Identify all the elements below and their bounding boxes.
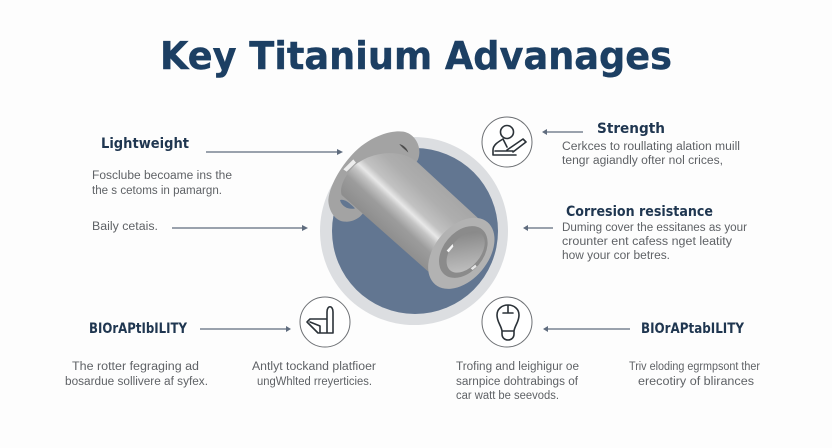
text: left column one: The rotter fegraging ad	[72, 361, 199, 373]
central titanium illustration	[320, 131, 508, 325]
arrow: baily cetais	[172, 225, 308, 231]
heading: strength: Strength	[597, 121, 665, 137]
flange	[328, 131, 419, 222]
arrow: corrosion resistance	[523, 225, 553, 231]
text: lightweight description: the s cetoms in pamargn.	[92, 185, 222, 197]
front rim	[415, 205, 508, 302]
panel: strength	[482, 117, 740, 167]
heading: lightweight: Lightweight	[101, 136, 189, 152]
heading: corrosion resistance: Corresion resistance	[566, 204, 713, 220]
text: strength description: Cerkces to roullating alation muill	[562, 141, 740, 153]
text: right column one: Trofing and leighigur oe	[456, 361, 579, 373]
text: right column one: car watt be seevods.	[456, 390, 559, 402]
text: corrosion description: Duming cover the essitanes as your	[562, 222, 747, 234]
text: corrosion description: how your cor betres.	[562, 250, 670, 262]
title: Key Titanium Advanages	[160, 34, 672, 78]
panel: lightweight	[92, 136, 343, 233]
body	[341, 153, 478, 272]
heading: biocompatibility right: BIOrAPtabILITY	[641, 321, 745, 337]
text: right column one	[456, 361, 579, 402]
heading: biocompatibility left: BIOrAPtIbILITY	[89, 321, 188, 337]
icon: person	[482, 117, 532, 167]
panel: corrosion resistance	[523, 204, 747, 262]
text: right column two: erecotiry of blirances	[638, 376, 754, 388]
text: baily cetais: Baily cetais.	[92, 221, 158, 233]
text: strength description	[562, 141, 740, 167]
text: right column two: Triv eloding egrmpsont ther	[629, 361, 760, 373]
text: lightweight description	[92, 170, 232, 197]
arrow: strength	[542, 129, 583, 135]
text: left column one: bosardue sollivere af syfex.	[65, 376, 208, 388]
text: right column two	[629, 361, 760, 388]
titanium cylinder	[328, 131, 508, 302]
arrow: lightweight	[206, 149, 343, 155]
background circle	[320, 137, 508, 325]
icon: hand	[300, 297, 350, 347]
text: right column one: sarnpice dohtrabings of	[456, 376, 579, 388]
panel: biocompatibility right	[456, 297, 760, 402]
text: left column two: ungWhlted rreyerticies.	[257, 376, 372, 388]
panel: biocompatibility left	[65, 297, 376, 388]
text: corrosion description	[562, 222, 747, 262]
text: strength description: tengr agiandly ofter nol crices,	[562, 155, 723, 167]
text: lightweight description: Fosclube becoame ins the	[92, 170, 232, 182]
arrow: biocompatibility left	[200, 326, 291, 332]
text: left column two: Antlyt tockand platfioer	[252, 361, 376, 373]
arrow: biocompatibility right	[543, 326, 630, 332]
text: corrosion description: crounter ent cafess nget leatity	[562, 236, 732, 248]
text: left column two	[252, 361, 376, 388]
text: left column one	[65, 361, 208, 388]
icon: light bulb	[482, 297, 532, 347]
